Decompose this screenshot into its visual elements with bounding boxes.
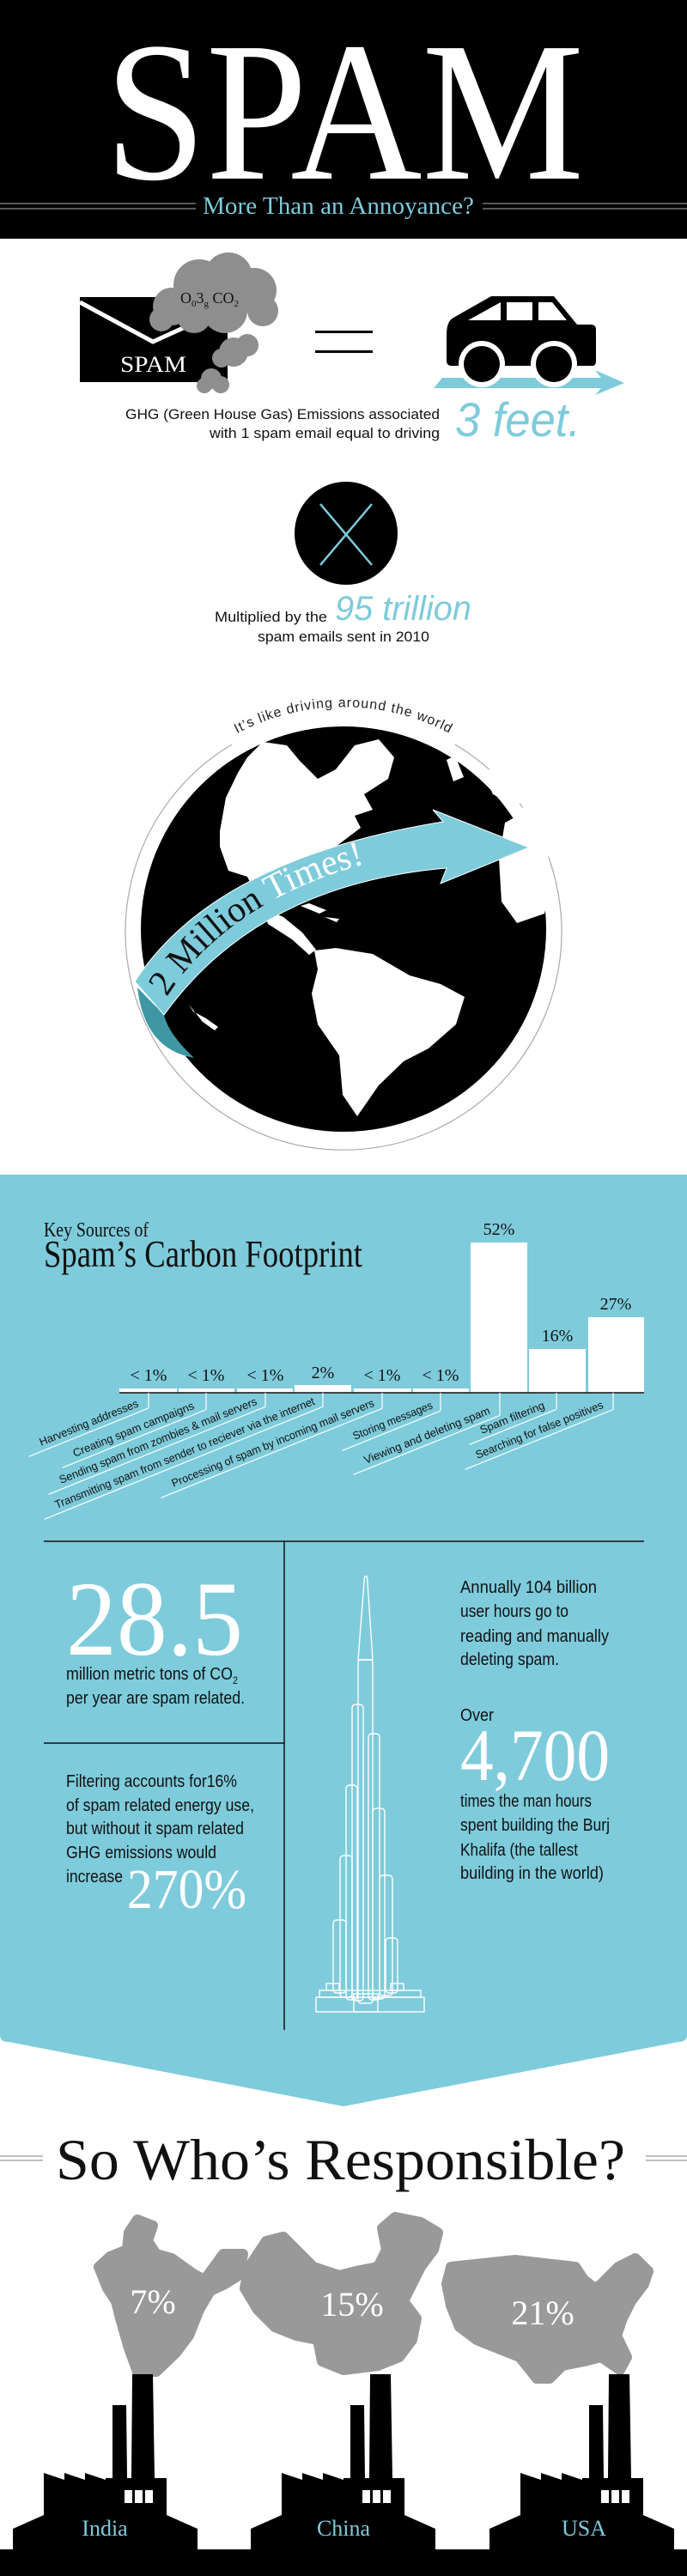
text: GHG emissions per spam email: with 1 spam email equal to driving: [209, 425, 440, 441]
bar labels: Creating spam campaigns: [71, 1399, 197, 1460]
bar chart: 52%: [483, 1220, 514, 1239]
arc text: It’s like driving around the world: [234, 699, 453, 733]
ribbon: 2 Million Times: [136, 809, 528, 1058]
bar chart: < 1%: [364, 1366, 400, 1385]
bar chart: < 1%: [131, 1366, 167, 1385]
icon: spam envelope with cloud: g: [204, 299, 210, 309]
icon: spam envelope with cloud: SPAM: [120, 352, 186, 377]
panel: USA: [447, 2258, 674, 2549]
bar labels: Sending spam from zombies & mail servers: [58, 1394, 259, 1486]
icon: spam envelope with cloud: O: [180, 289, 192, 307]
stat: filtering 270%: Filtering accounts for16%: [66, 1772, 237, 1791]
factory: USA: [489, 2374, 674, 2549]
bar labels: Processing of spam by incoming mail servers: [170, 1396, 376, 1490]
subtitle: More Than an Annoyance?: [203, 193, 474, 220]
stats grid lines: [44, 1541, 644, 2030]
stat: 4,700 times Burj Khalifa: Over: [460, 1706, 494, 1725]
heading: So Who's Responsible?: So Who’s Responsible?: [56, 2127, 625, 2192]
bar labels: Harvesting addresses: [38, 1397, 141, 1449]
chart heading: [44, 1219, 362, 1275]
panel: carbon footprint (blue section): [0, 1175, 687, 2106]
stat: filtering 270%: GHG emissions would: [66, 1844, 216, 1862]
stat: 28.5 million metric tons: million metric tons of CO: [66, 1665, 253, 1684]
stat: 4,700 times Burj Khalifa: Khalifa (the tallest: [460, 1841, 578, 1860]
bar labels: [23, 1393, 613, 1519]
stat: 4,700 times Burj Khalifa: times the man hours: [460, 1792, 592, 1811]
stat: 104 billion user hours: deleting spam.: [460, 1650, 559, 1669]
stat: filtering 270%: 270%: [127, 1858, 246, 1921]
stat: 104 billion user hours: user hours go to: [460, 1602, 568, 1621]
stat: 104 billion user hours: reading and manually: [460, 1627, 609, 1646]
bar chart: 16%: [542, 1327, 573, 1346]
factory: China: China: [317, 2516, 371, 2541]
bar chart: < 1%: [188, 1366, 224, 1385]
icon: spam envelope with cloud: [80, 252, 278, 393]
equals sign: [315, 331, 373, 353]
text: GHG emissions per spam email: [125, 406, 440, 441]
title: SPAM: SPAM: [105, 2, 584, 222]
stat: 4,700 times Burj Khalifa: 4,700: [460, 1714, 610, 1796]
panel: China: [245, 2217, 438, 2549]
cloud map: China 15%: [245, 2217, 438, 2370]
factory: India: [13, 2374, 198, 2549]
chart heading: Key Sources of: [44, 1219, 149, 1242]
text: GHG emissions per spam email: GHG (Green House Gas) Emissions associated: [125, 406, 440, 422]
icon: Burj Khalifa outline: [316, 1577, 424, 2012]
stat: filtering 270%: [66, 1772, 254, 1921]
globe illustration: [125, 699, 562, 1151]
stat: 104 billion user hours: Annually 104 billion: [460, 1578, 597, 1597]
stat: 28.5 million metric tons: per year are spam related.: [66, 1689, 245, 1708]
cloud map: USA 21%: [447, 2258, 648, 2379]
icon: car with arrow: [434, 296, 624, 395]
stat: filtering 270%: increase: [66, 1868, 123, 1886]
bar chart: < 1%: [247, 1366, 283, 1385]
stat: 3 feet: 3 feet.: [455, 392, 581, 447]
factory: India: India: [82, 2516, 128, 2541]
icon: spam envelope with cloud: 0: [192, 299, 197, 309]
icon: spam envelope with cloud: CO: [209, 289, 234, 307]
stat: 104 billion user hours: [460, 1578, 609, 1669]
stat: 4,700 times Burj Khalifa: spent building the Burj: [460, 1816, 610, 1835]
footer ground bar: [0, 2549, 687, 2576]
bar labels: Transmitting spam from sender to reciever via the internet: [53, 1394, 317, 1511]
bar chart: < 1%: [423, 1366, 459, 1385]
ribbon: 2 Million Times: 2 Million Times!: [149, 841, 361, 996]
panel: India: [13, 2220, 243, 2549]
text: 95 trillion spam emails: spam emails sent in 2010: [258, 629, 429, 645]
bar chart: 2%: [312, 1364, 334, 1382]
cloud map: India 7%: [99, 2220, 243, 2372]
bar labels: Viewing and deleting spam: [362, 1404, 492, 1467]
cloud map: China 15%: 15%: [320, 2285, 384, 2324]
bar labels: Searching for false positives: [474, 1398, 605, 1461]
stat: 4,700 times Burj Khalifa: building in the world): [460, 1864, 604, 1883]
bar chart: [23, 1220, 644, 1519]
continents: [189, 739, 550, 1116]
text: 95 trillion spam emails: [215, 590, 471, 645]
bar labels: Storing messages: [351, 1399, 435, 1443]
stat: 28.5 million metric tons: 2: [233, 1674, 238, 1686]
text: 95 trillion spam emails: Multiplied by the: [215, 609, 327, 625]
header band: [0, 0, 687, 239]
stat: 4,700 times Burj Khalifa: [460, 1706, 610, 1883]
text: 95 trillion spam emails: 95 trillion: [335, 590, 471, 628]
cloud map: India 7%: 7%: [130, 2282, 176, 2321]
stat: filtering 270%: but without it spam related: [66, 1820, 244, 1838]
icon: spam envelope with cloud: 3: [196, 289, 204, 307]
factory: China: [251, 2374, 435, 2549]
bar labels: Spam filtering: [478, 1399, 546, 1437]
cloud map: USA 21%: 21%: [511, 2293, 575, 2332]
bar chart: 27%: [600, 1295, 631, 1314]
icon: spam envelope with cloud: 2: [234, 299, 239, 309]
stat: 28.5 million metric tons: 28.5: [66, 1560, 243, 1678]
factory: USA: USA: [562, 2516, 606, 2541]
stat: filtering 270%: of spam related energy use,: [66, 1796, 254, 1815]
chart heading: Spam’s Carbon Footprint: [44, 1233, 362, 1275]
icon: multiply circle: [295, 482, 398, 585]
